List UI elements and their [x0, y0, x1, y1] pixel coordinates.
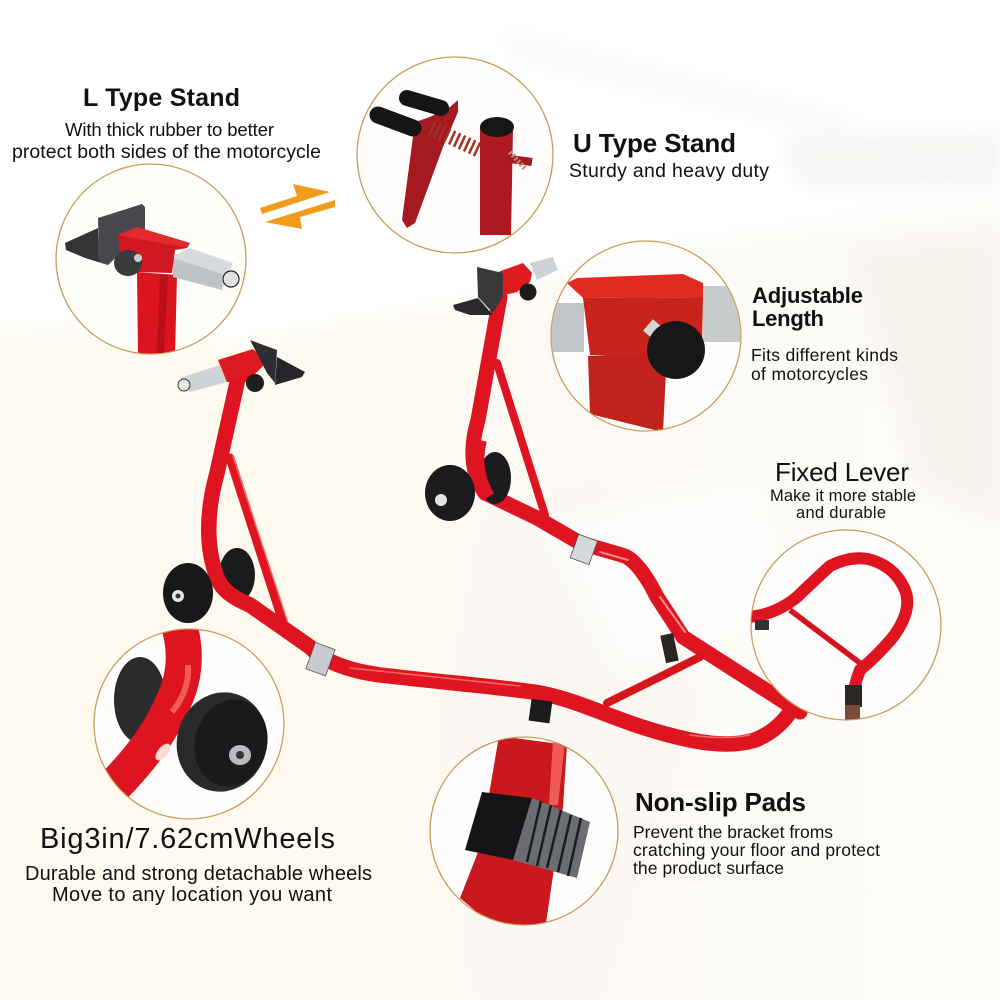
text: non-slip description: cratching your floor and protect [633, 840, 880, 860]
stand: rear wheels [425, 440, 511, 521]
text: L type description [12, 119, 321, 163]
circle: adjustable length detail [548, 241, 743, 432]
text: L type description: protect both sides of the motorcycle [12, 141, 321, 163]
text: L type description: With thick rubber to better [65, 119, 274, 140]
text: wheels description: Move to any location you want [52, 884, 332, 906]
text: adjustable description [751, 345, 898, 384]
heading: Non-slip Pads: Non-slip Pads [635, 787, 806, 817]
stand: rear section [473, 297, 800, 712]
text: fixed lever description: and durable [796, 504, 886, 522]
text: wheels description [25, 863, 372, 906]
circle: U type detail [357, 57, 553, 253]
stand: front wheels [163, 563, 213, 623]
stand: joints and pads [306, 534, 679, 723]
text: fixed lever description [770, 487, 916, 522]
text: adjustable description: of motorcycles [751, 364, 868, 384]
heading: U Type Stand: U Type Stand [573, 128, 736, 158]
heading: wheels: Big3in/7.62cmWheels [40, 823, 335, 855]
text: adjustable description: Fits different kinds [751, 345, 898, 365]
heading: L Type Stand: L Type Stand [83, 84, 240, 112]
text: U type description: Sturdy and heavy duty [569, 160, 769, 182]
heading: Adjustable Length: Length [752, 306, 824, 331]
arrows: swap [260, 184, 335, 229]
stand: front top bracket [178, 340, 305, 392]
text: fixed lever description: Make it more stable [770, 487, 916, 505]
heading: Adjustable Length [752, 283, 863, 331]
circle: L type detail [56, 164, 246, 356]
circle: wheels detail [94, 622, 284, 819]
heading: Fixed Lever: Fixed Lever [775, 457, 909, 487]
stand: rear top bracket [453, 257, 558, 315]
stand: front section [209, 383, 794, 744]
text: non-slip description: the product surface [633, 858, 784, 878]
text: non-slip description: Prevent the bracket froms [633, 822, 833, 842]
heading: Adjustable Length: Adjustable [752, 283, 863, 308]
text: non-slip description [633, 822, 880, 878]
circle: fixed lever detail [748, 530, 941, 721]
text: wheels description: Durable and strong detachable wheels [25, 863, 372, 885]
circle: non-slip pads detail [430, 736, 618, 930]
